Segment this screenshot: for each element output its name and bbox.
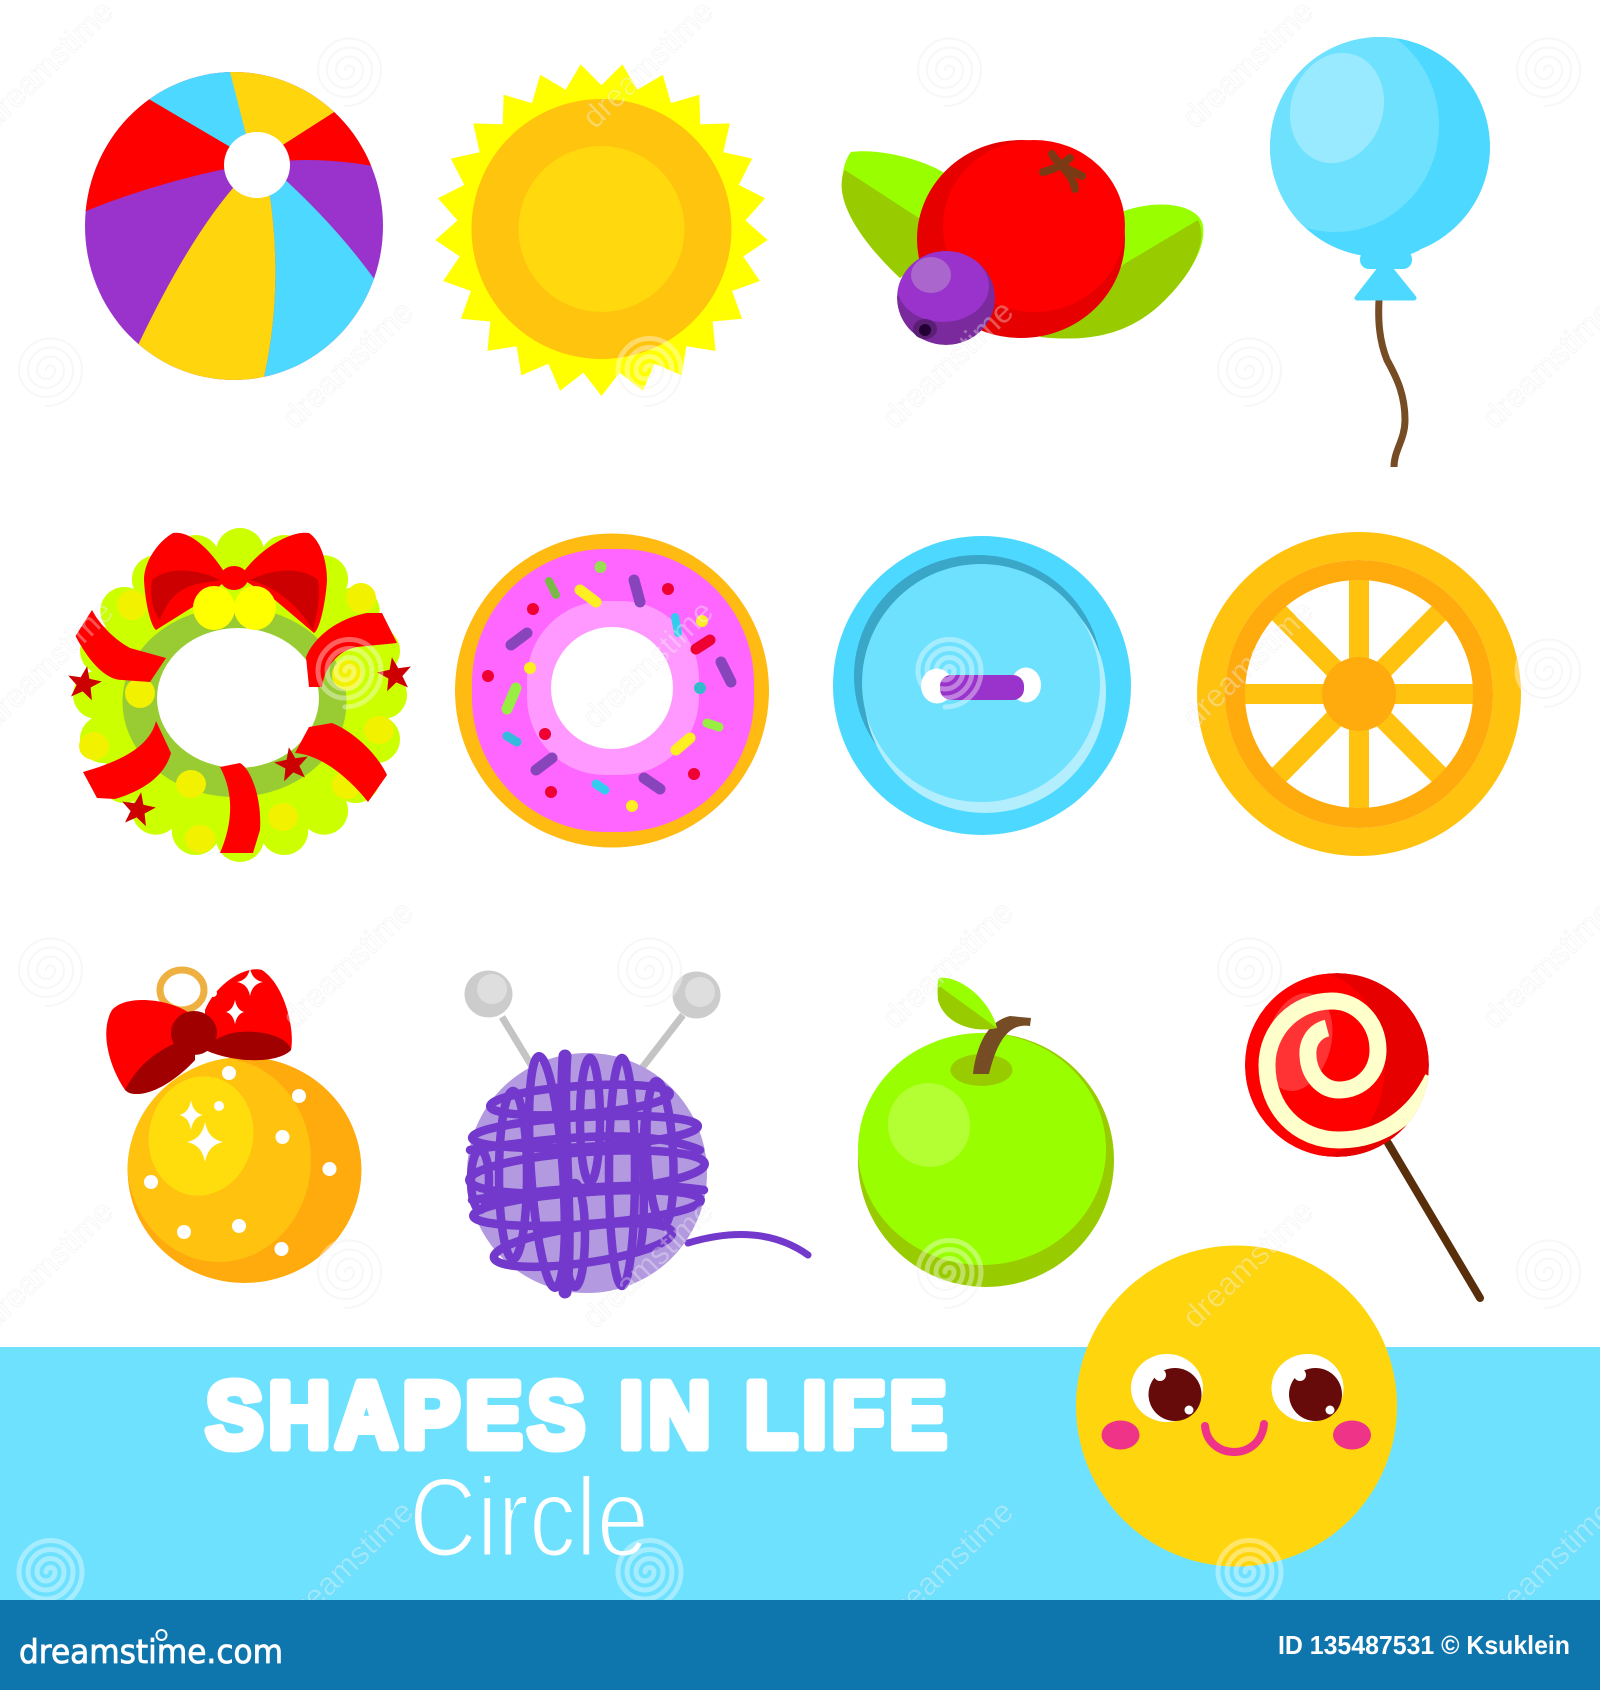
- footer logo: dreamstime.com: dreamstime.com: [19, 1632, 283, 1671]
- watermark text: dreamstime: [575, 1193, 720, 1335]
- icon: sun: [434, 62, 769, 396]
- watermark text: dreamstime: [1175, 593, 1320, 735]
- watermark text: dreamstime: [875, 293, 1020, 435]
- footer bar: [0, 1600, 1600, 1690]
- watermark text: dreamstime: [1175, 1193, 1320, 1335]
- icon: blue button: [833, 536, 1131, 835]
- icon: beach ball: [85, 72, 383, 380]
- subtitle: Circle: Circle: [409, 1455, 649, 1580]
- watermark text: dreamstime: [275, 893, 420, 1035]
- watermark text: dreamstime: [275, 1493, 420, 1635]
- watermark text: dreamstime: [875, 1493, 1020, 1635]
- icon: red lollipop: [1245, 973, 1480, 1298]
- faint watermark spirals on white: [19, 38, 1580, 1308]
- title: Shapes in Life: SHAPES IN LIFE: [206, 1363, 952, 1467]
- icon: blue balloon: [1270, 37, 1490, 467]
- icon: wagon wheel: [1211, 546, 1507, 842]
- icon: cranberry and blueberry with leaves: [842, 140, 1203, 345]
- watermark text: dreamstime: [575, 593, 720, 735]
- icon: Christmas wreath: [65, 528, 414, 862]
- icon: ball of yarn with needles: [464, 970, 808, 1293]
- icon: pink donut: [455, 534, 769, 848]
- footer credit: image ID and author: ID 135487531 © Ksuklein: [1278, 1630, 1570, 1660]
- mascot: smiling yellow circle: [1076, 1246, 1397, 1566]
- title band: [0, 1347, 1600, 1600]
- icon: Christmas ornament: [106, 968, 361, 1283]
- icon: green apple: [858, 978, 1114, 1287]
- watermark text: dreamstime: [275, 293, 420, 435]
- watermark text: dreamstime: [875, 893, 1020, 1035]
